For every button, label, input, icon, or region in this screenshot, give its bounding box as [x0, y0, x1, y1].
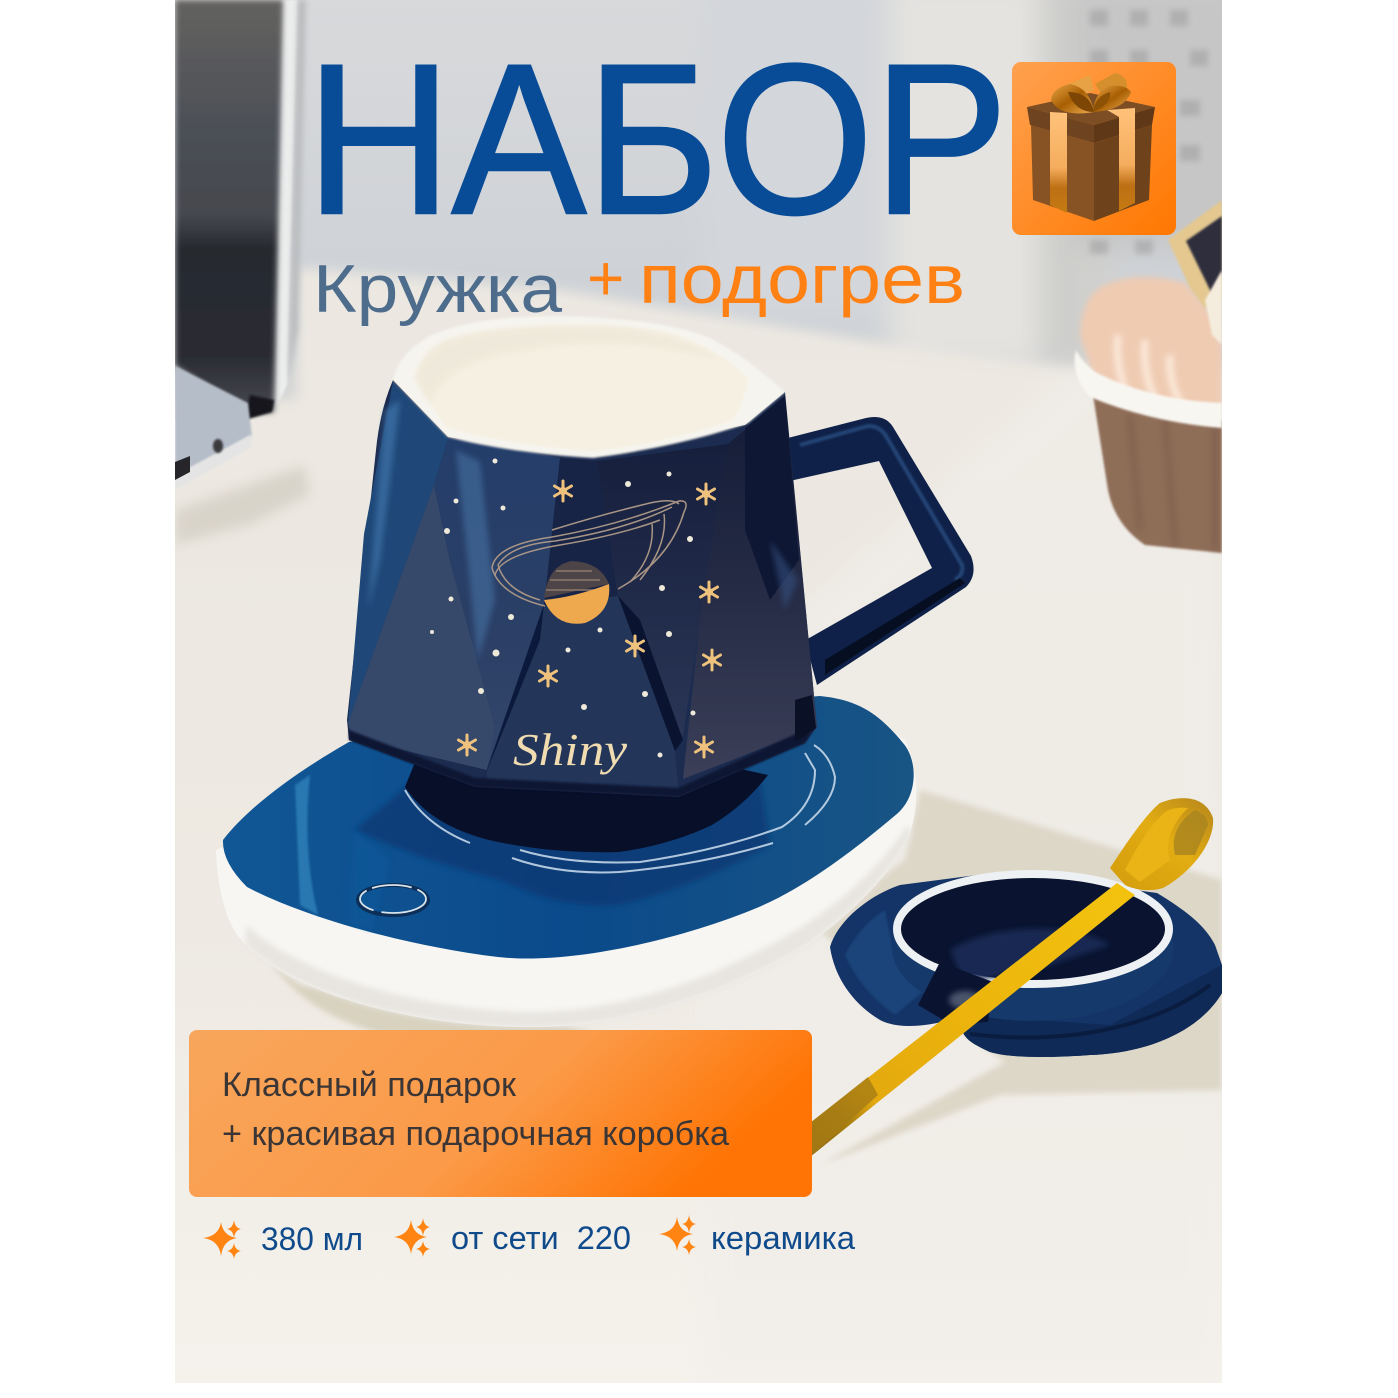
mug foot	[405, 764, 768, 852]
callout text: line two: + красивая подарочная коробка	[222, 1115, 729, 1153]
callout	[189, 1030, 812, 1197]
warmer	[216, 696, 916, 1027]
white dots	[430, 458, 696, 758]
lid white ring	[897, 874, 1169, 984]
lid well shine	[950, 929, 1110, 985]
bow	[1051, 73, 1131, 114]
icon: sparkle	[203, 1220, 241, 1259]
lid well wall	[892, 951, 1042, 1021]
mug facets	[348, 382, 817, 797]
mug body	[347, 380, 817, 797]
lid outer plate	[830, 872, 1222, 1057]
burlap shadow on table	[810, 790, 1222, 1165]
icon: sparkle	[394, 1218, 430, 1257]
cupcake topper	[1168, 200, 1222, 308]
feature: power	[394, 1218, 631, 1257]
mug rim	[393, 316, 785, 458]
cupcake frosting	[1080, 277, 1222, 410]
subtitle: warmer: +	[587, 242, 624, 314]
subtitle: mug: Кружка	[313, 251, 562, 327]
feature: power: от сети 220	[451, 1220, 631, 1256]
planet ring	[492, 501, 686, 606]
planet	[544, 561, 609, 624]
warmer blue top	[223, 696, 914, 959]
feature: volume: 380 мл	[261, 1221, 363, 1257]
spoon	[810, 798, 1213, 1157]
mug handle	[780, 417, 974, 685]
cupcake paper rim	[1075, 350, 1222, 428]
cupcake	[1075, 200, 1222, 553]
lid gap	[918, 962, 993, 1024]
subtitle: warmer: подогрев	[639, 240, 965, 318]
blurred dot pattern at the back	[1090, 10, 1208, 254]
product photo	[175, 0, 1245, 1383]
mug	[347, 316, 817, 852]
icon: gift box	[1012, 62, 1176, 235]
callout text: line one: Классный подарок	[222, 1066, 517, 1104]
feature: material	[659, 1215, 855, 1256]
warmer rings	[405, 745, 835, 872]
gold stars	[458, 481, 720, 757]
mug lettering: Shiny	[513, 724, 628, 775]
power button	[358, 885, 428, 915]
feature: volume	[203, 1220, 363, 1259]
lid	[830, 872, 1222, 1057]
laptop	[175, 0, 306, 490]
table surface	[175, 268, 1222, 1383]
warmer base	[216, 734, 916, 1027]
feature: material: керамика	[711, 1220, 855, 1256]
title: НАБОР	[306, 20, 1008, 259]
table shadow near laptop	[175, 465, 310, 545]
icon: sparkle	[659, 1215, 696, 1255]
mug interior	[415, 326, 748, 451]
background wall	[175, 0, 1222, 420]
